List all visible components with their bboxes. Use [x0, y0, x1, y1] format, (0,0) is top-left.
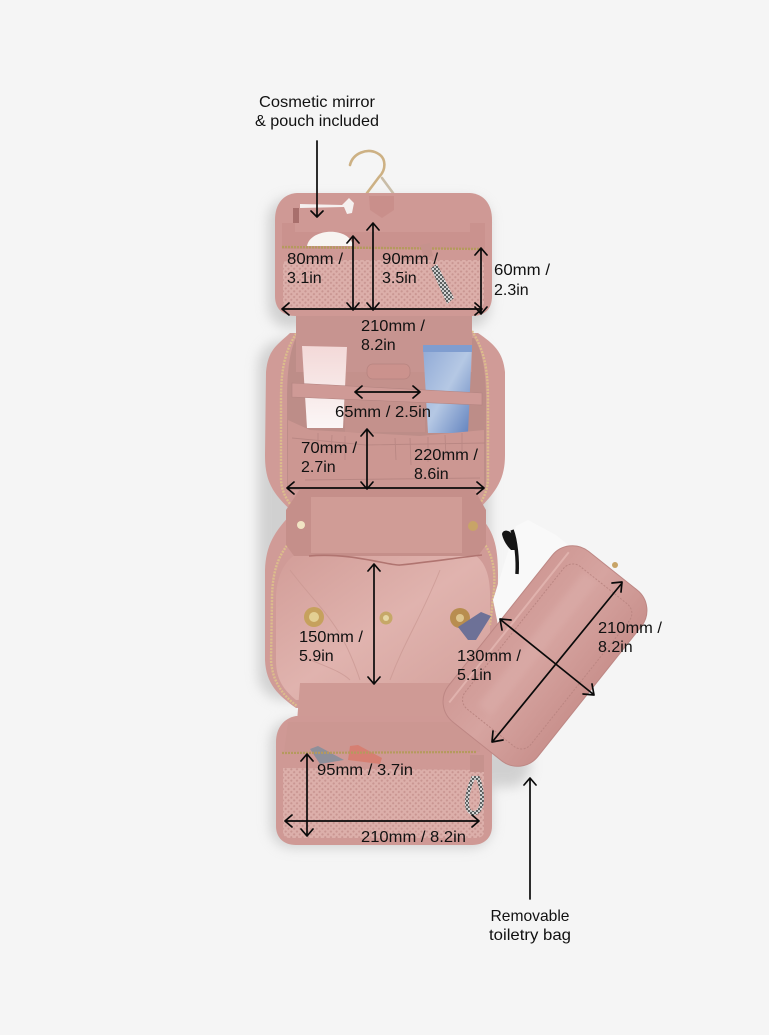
mirror pocket [295, 207, 470, 232]
label: 210mm pouch: 210mm / [598, 620, 663, 637]
satin fold lines [290, 570, 440, 680]
dimension: bottom flap [285, 754, 479, 846]
arrow: 220mm [287, 482, 484, 494]
top flap lining [296, 310, 472, 372]
arrow: 90mm [367, 223, 379, 310]
snap closures on hinge [297, 521, 305, 529]
label: 60mm: 60mm / [494, 262, 551, 279]
hanger tab [369, 196, 394, 218]
razor [458, 612, 491, 640]
label: 90mm: 90mm / [382, 251, 439, 268]
mesh pocket [283, 768, 484, 838]
panel: bottom flap [276, 716, 492, 845]
towel and toothbrush [493, 520, 572, 625]
callout: cosmetic mirror [255, 94, 379, 217]
panel: middle bag body [265, 333, 505, 708]
upper compartment lining [287, 338, 486, 490]
arrow [311, 141, 323, 217]
dimension: middle compartment: 8.6in [414, 466, 449, 483]
dimension: middle compartment: 2.7in [301, 459, 336, 476]
icon: magnetic snaps [304, 607, 470, 628]
dimension: pouch [457, 582, 663, 742]
arrow: 150mm [368, 564, 380, 684]
removable toiletry pouch [433, 520, 657, 777]
panel: top flap [275, 193, 492, 316]
zip [282, 752, 476, 753]
arrow: 70mm [361, 429, 373, 489]
arrow: 210mm [282, 303, 482, 315]
bag shadows [258, 198, 530, 848]
dimension: top flap: 3.1in [287, 270, 322, 287]
arrow: 95mm [301, 754, 313, 836]
lower compartment lining [276, 552, 490, 700]
label: 150mm: 150mm / [299, 629, 364, 646]
arrow: 130mm pouch width [500, 619, 594, 695]
label: 210mm: 210mm / [361, 318, 426, 335]
dimension: middle compartment [287, 386, 484, 494]
arrow: 80mm [347, 236, 359, 310]
panel: lower flap strip [297, 683, 468, 722]
gathered pocket [288, 420, 484, 489]
pouch body [433, 535, 657, 777]
zip [282, 247, 482, 249]
dimension: pouch: 8.2in [598, 639, 633, 656]
arrow: 210mm [285, 815, 479, 827]
label: 70mm: 70mm / [301, 440, 358, 457]
dimension: top flap: 8.2in [361, 337, 396, 354]
white pad [307, 232, 353, 246]
label: 210mm: 210mm / 8.2in [361, 829, 466, 846]
icon: white tube [302, 346, 347, 428]
callout text: Cosmetic mirror [259, 94, 376, 111]
middle hinge panel [286, 489, 486, 556]
mesh pocket [283, 260, 484, 308]
elastic strap [292, 383, 482, 405]
cosmetic mirror [300, 198, 354, 214]
dimension: top flap: 3.5in [382, 270, 417, 287]
label patch [367, 364, 410, 379]
brush and lip product [310, 746, 344, 764]
dimension: top flap: 2.3in [494, 282, 529, 299]
pouch zip tag [612, 562, 618, 568]
callout: removable toiletry bag [489, 778, 571, 944]
arrow: 210mm pouch length [492, 582, 622, 742]
label: 95mm: 95mm / 3.7in [317, 762, 413, 779]
zip pull [420, 243, 433, 258]
label: 220mm: 220mm / [414, 447, 479, 464]
arrow: 65mm [355, 386, 420, 398]
zip pull [470, 755, 484, 772]
dimension: pouch: 5.1in [457, 667, 492, 684]
open hanging organiser bag [265, 193, 505, 845]
arrow [524, 778, 536, 899]
callout: removable toiletry bag: toiletry bag [489, 927, 571, 944]
callout: cosmetic mirror: & pouch included [255, 113, 379, 130]
dimension: top flap [282, 223, 551, 354]
label: 130mm pouch: 130mm / [457, 648, 522, 665]
label: 65mm: 65mm / 2.5in [335, 404, 431, 421]
label: 80mm: 80mm / [287, 251, 344, 268]
icon: gold hanger hook [350, 151, 393, 193]
bag zip edges [271, 331, 494, 706]
arrow: 60mm [475, 248, 487, 314]
icon: blue tube [423, 345, 472, 433]
dimension: lower compartment: 5.9in [299, 648, 334, 665]
dimension: lower compartment [299, 564, 380, 684]
callout text: Removable [490, 908, 570, 925]
